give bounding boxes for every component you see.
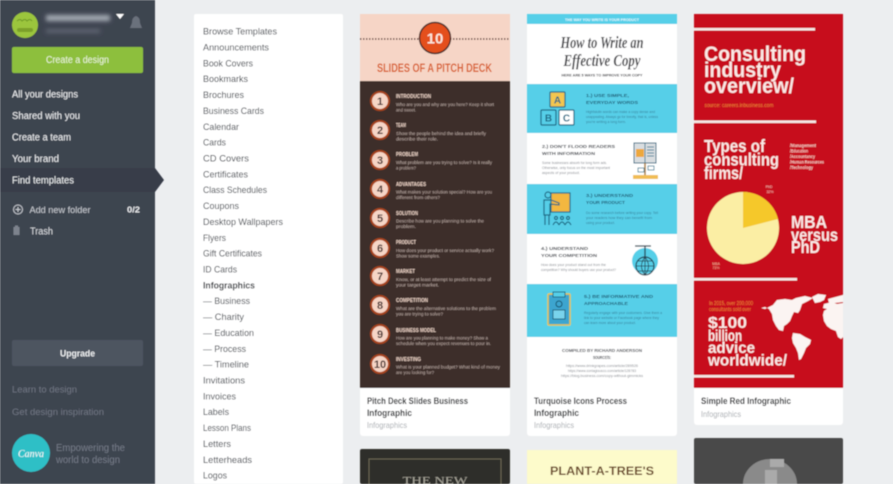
heading: consulting industry overview: industry [704, 59, 781, 82]
icon: ABC blocks: C [563, 114, 570, 124]
navigation menu: All your designs [12, 90, 78, 100]
pitch deck list: 5 [377, 213, 383, 225]
pitch deck list: and sweet. [396, 108, 416, 112]
category list: Brochures [203, 90, 244, 101]
firm type list: /Accountancy [790, 154, 816, 159]
navigation menu: Find templates [12, 176, 74, 186]
section bands [527, 84, 677, 337]
section 3 text: using your product. [586, 221, 615, 225]
add new folder row: Add new folder [30, 205, 90, 216]
category list: Logos [203, 470, 227, 482]
orange stat line [709, 301, 753, 313]
section 4 text: YOUR COMPETITION [541, 253, 598, 259]
navigation menu: Shared with you [12, 111, 80, 122]
world map [761, 294, 843, 360]
pitch deck list: are you looking for? [396, 370, 434, 375]
caption: pitch deck: Infographic [367, 408, 412, 419]
category list: Browse Templates [203, 26, 277, 38]
pitch deck list: PROBLEM [396, 152, 418, 158]
turquoise title: Effective Copy [563, 51, 641, 70]
pitch deck list: How are you planning to make money? Show a [396, 336, 488, 340]
footer links: Get design inspiration [12, 407, 104, 418]
pitch deck list: TEAM [396, 123, 406, 129]
card: pitch deck [360, 14, 510, 436]
pitch deck header: 10 [427, 30, 443, 48]
turquoise title [560, 33, 644, 78]
pitch deck list: What makes your solution special? How are you [396, 190, 492, 194]
caption: pitch deck: Infographics [367, 420, 407, 430]
heading: MBA versus PhD [791, 212, 838, 257]
pie chart: PhD [766, 185, 773, 189]
pitch deck list: 1 [377, 96, 383, 108]
firm type list: /Technology [790, 165, 814, 170]
section 1 text: 1.) USE SIMPLE, [586, 93, 630, 99]
icon: ABC blocks: B [545, 114, 552, 124]
category list: Coupons [203, 201, 239, 212]
trash row: Trash [30, 226, 53, 238]
category list: — Business [203, 296, 250, 307]
button: upgrade [12, 340, 143, 366]
pitch deck list: Show some examples. [396, 254, 440, 258]
pitch deck list: 8 [377, 300, 383, 312]
navigation menu [12, 90, 80, 186]
pitch deck list: schedule when you expect revenues to pour in. [396, 341, 491, 346]
pitch deck list: BUSINESS MODEL [396, 328, 437, 334]
heading: types of consulting firms: consulting [704, 150, 779, 170]
category list: Cards [203, 138, 226, 148]
section 1 text [586, 93, 658, 124]
credits: https://www.contagiousco.com/article/128783 [568, 369, 636, 373]
icon: ABC blocks [541, 92, 574, 125]
card: dark photo [694, 438, 843, 484]
section 3 text: YOUR PRODUCT [586, 200, 625, 206]
pitch deck list: problem. [396, 224, 416, 229]
pitch deck list: SOLUTION [396, 211, 418, 217]
heading: consulting industry overview: overview/ [704, 75, 794, 98]
navigation menu: Your brand [12, 154, 59, 165]
caption: turquoise: Turquoise Icons Process [534, 396, 627, 407]
white divider bars [694, 28, 816, 378]
pitch deck list: Show the people behind the idea and briefly [396, 131, 487, 136]
section 5 text [584, 294, 662, 325]
card: simple red [694, 14, 843, 425]
orange stat line: consultants sold over [709, 307, 751, 313]
pitch deck list: What is your planned budget? What kind of money [396, 364, 501, 370]
panel: sidebar [0, 0, 164, 484]
heading: types of consulting firms: firms/ [704, 163, 743, 183]
trash row [14, 226, 53, 238]
category list: Class Schedules [203, 185, 267, 196]
category list: Invitations [203, 376, 245, 386]
section 3 text: 3.) UNDERSTAND [586, 193, 634, 199]
canva logo: Canva [18, 448, 44, 460]
card: plant-a-tree [527, 450, 677, 484]
heading: $100 billion: billion [708, 328, 742, 345]
caption: simple red: Simple Red Infographic [701, 396, 791, 407]
section 3 text: Do some research before writing your copy. Tell [586, 211, 658, 215]
pitch deck list: Know, or at least attempt to predict the size of [396, 277, 492, 282]
category list: Letterheads [203, 455, 252, 466]
icon: ABC blocks: A [554, 96, 561, 106]
pitch deck list: 2 [377, 125, 383, 137]
heading: MBA versus PhD: versus [791, 225, 838, 245]
pitch deck list: 9 [377, 329, 383, 341]
firm type list [790, 143, 825, 170]
category list: ID Cards [203, 264, 237, 276]
pitch deck list: a problem? [396, 166, 416, 170]
heading: MBA versus PhD: PhD [791, 237, 820, 257]
card: plant-a-tree: PLANT-A-TREE'S [550, 464, 654, 478]
turquoise top band [527, 14, 677, 24]
pie chart [707, 185, 779, 270]
pitch deck list: PRODUCT [396, 240, 416, 246]
add new folder row [14, 205, 141, 216]
pitch deck list: 4 [377, 184, 384, 196]
credits: SOURCE/S: [593, 355, 611, 360]
section 5 text: can learn more about your product. [584, 321, 636, 325]
blurred user name [46, 15, 110, 33]
section 2 text: Otherwise, only focus on the most important [542, 166, 610, 170]
section 1 text: Highfalutin words can make a copy dense and [586, 110, 655, 114]
pitch deck header: SLIDES OF A PITCH DECK [377, 61, 492, 75]
footer links [12, 384, 104, 418]
heading: $100 billion: advice [708, 340, 755, 357]
icon: open book [633, 143, 658, 179]
panel: template categories [194, 14, 343, 484]
category list: Calendar [203, 122, 239, 133]
credits: COMPILED BY RICHARD ANDERSON [562, 348, 642, 353]
firm type list: /Human Resources [790, 160, 825, 164]
pie chart: 73% [712, 266, 720, 270]
heading: types of consulting firms: Types of [704, 136, 765, 156]
caption: simple red: Infographics [701, 409, 741, 419]
footer links: Learn to design [12, 384, 77, 396]
category list: — Timeline [203, 360, 249, 370]
section 2 text: 2.) DON'T FLOOD READERS [542, 144, 616, 150]
pitch deck list: 6 [377, 243, 383, 255]
heading: consulting industry overview: Consulting [704, 43, 806, 66]
category list: Gift Certificates [203, 248, 262, 260]
pitch deck list: Describe how are you planning to solve the [396, 218, 484, 224]
caption: pitch deck [367, 396, 468, 430]
credits [561, 348, 643, 378]
active nav highlight [0, 168, 164, 192]
canva logo [12, 434, 50, 472]
source line: source: careers.inbusiness.com [704, 103, 774, 109]
caption: turquoise: Infographics [534, 420, 574, 430]
turquoise title: HERE ARE 5 WAYS TO IMPROVE YOUR COPY [562, 74, 643, 78]
credits: https://blog.business.com/copy-without-gimmicks [561, 374, 643, 378]
section 4 text: How does your product stand out from the [541, 263, 606, 267]
button: create a design [12, 47, 143, 73]
section 4 text [541, 246, 616, 272]
section 3 text: your readers how they can benefit from [586, 216, 652, 220]
category list: Letters [203, 439, 231, 450]
heading: consulting industry overview [704, 43, 806, 98]
card: the new [360, 449, 510, 484]
pitch deck list: MARKET [396, 269, 416, 275]
icon: clipboard [548, 292, 570, 325]
category list: Invoices [203, 392, 236, 402]
icon: notification bell [130, 16, 142, 28]
pitch deck list: describe their role. [396, 136, 438, 142]
pie chart: MBA [712, 262, 720, 266]
heading: $100 billion [707, 315, 788, 370]
section 5 text: link to your website or Facebook page where they [584, 316, 659, 320]
category list: Bookmarks [203, 74, 248, 85]
tagline [55, 443, 125, 466]
icon: dropdown caret [116, 14, 124, 19]
pitch deck list: How does your product or service actually work? [396, 248, 494, 253]
navigation menu: Create a team [12, 132, 71, 144]
tagline: world to design [55, 455, 120, 466]
pitch deck list: 10 [374, 359, 386, 371]
category list: Announcements [203, 42, 269, 54]
category list: Infographics [203, 280, 255, 292]
pitch deck list: Who are you and why are you here? Keep it short [396, 102, 495, 107]
pitch deck list: different from others? [396, 195, 440, 200]
firm type list: /Education [790, 148, 808, 154]
pitch deck header [360, 14, 510, 81]
section 5 text: 5.) BE INFORMATIVE AND [584, 294, 654, 300]
pitch deck list: INVESTING [396, 357, 421, 363]
section 4 text: 4.) UNDERSTAND [541, 246, 589, 252]
section 2 text: WITH INFORMATION [542, 151, 596, 157]
category list: CD Covers [203, 154, 249, 164]
button: create a design: Create a design [46, 55, 109, 66]
pitch deck list [360, 81, 510, 388]
pitch deck list: What problem are you trying to solve? Is it really [396, 160, 493, 165]
heading: $100 billion: worldwide/ [707, 352, 788, 370]
category list: Labels [203, 407, 229, 418]
card: turquoise icons [527, 14, 677, 436]
caption: turquoise [534, 396, 627, 430]
section 2 text [542, 144, 616, 175]
category list: Desktop Wallpapers [203, 217, 283, 228]
category list [203, 26, 283, 482]
caption: pitch deck: Pitch Deck Slides Business [367, 396, 468, 407]
section 5 text: Regularly engage with your customers. Give them a [584, 311, 662, 315]
icon: user avatar [12, 12, 38, 38]
turquoise top band: THE WAY YOU WRITE IS YOUR PRODUCT [565, 18, 640, 22]
section 5 text: APPROACHABLE [584, 301, 629, 307]
pitch deck list: ADVANTAGES [396, 182, 426, 188]
pitch deck list: What are the alternative solutions to the problem [396, 306, 496, 311]
category list: Lesson Plans [203, 423, 251, 434]
category list: Business Cards [203, 106, 264, 117]
category list: Certificates [203, 170, 248, 180]
category list: Book Covers [203, 58, 253, 70]
category list: — Charity [203, 312, 244, 323]
caption: turquoise: Infographic [534, 408, 579, 419]
tagline: Empowering the [56, 443, 125, 454]
pie chart: 32% [766, 190, 774, 194]
icon: presenter [544, 192, 571, 225]
section 1 text: EVERYDAY WORDS [586, 100, 639, 106]
pitch deck list: your target market. [396, 282, 439, 288]
credits: https://www.drinkgrapes.com/article/289526 [566, 364, 638, 368]
section 2 text: Some businesses absorb for long form ads. [542, 161, 607, 165]
section 2 text: aspects of your product. [542, 171, 580, 175]
section 4 text: competition? Why should buyers use your product? [541, 268, 616, 272]
pitch deck list: COMPETITION [396, 298, 428, 304]
pitch deck list: 3 [377, 155, 383, 167]
heading: $100 billion: $100 [708, 315, 747, 332]
pitch deck list: INTRODUCTION [396, 94, 431, 100]
heading: MBA versus PhD: MBA [791, 212, 827, 232]
heading: types of consulting firms [704, 136, 779, 183]
section 1 text: you're writing a long form. [586, 120, 626, 124]
caption: simple red [701, 396, 791, 419]
orange stat line: In 2015, over 200,000 [709, 301, 753, 307]
button: upgrade: Upgrade [60, 348, 95, 360]
pitch deck list: you are trying to solve? [396, 312, 443, 316]
category list: — Process [203, 344, 246, 355]
category list: Flyers [203, 233, 226, 244]
section 3 text [586, 193, 658, 225]
turquoise title: How to Write an [560, 33, 644, 52]
add new folder row: 0/2 [127, 206, 141, 214]
firm type list: /Management [790, 143, 817, 148]
icon: globe [632, 246, 658, 275]
pitch deck list: 7 [377, 271, 383, 283]
category list: — Education [203, 328, 254, 339]
section 1 text: unappealing. Always go for brevity, that is, unless [586, 115, 658, 119]
